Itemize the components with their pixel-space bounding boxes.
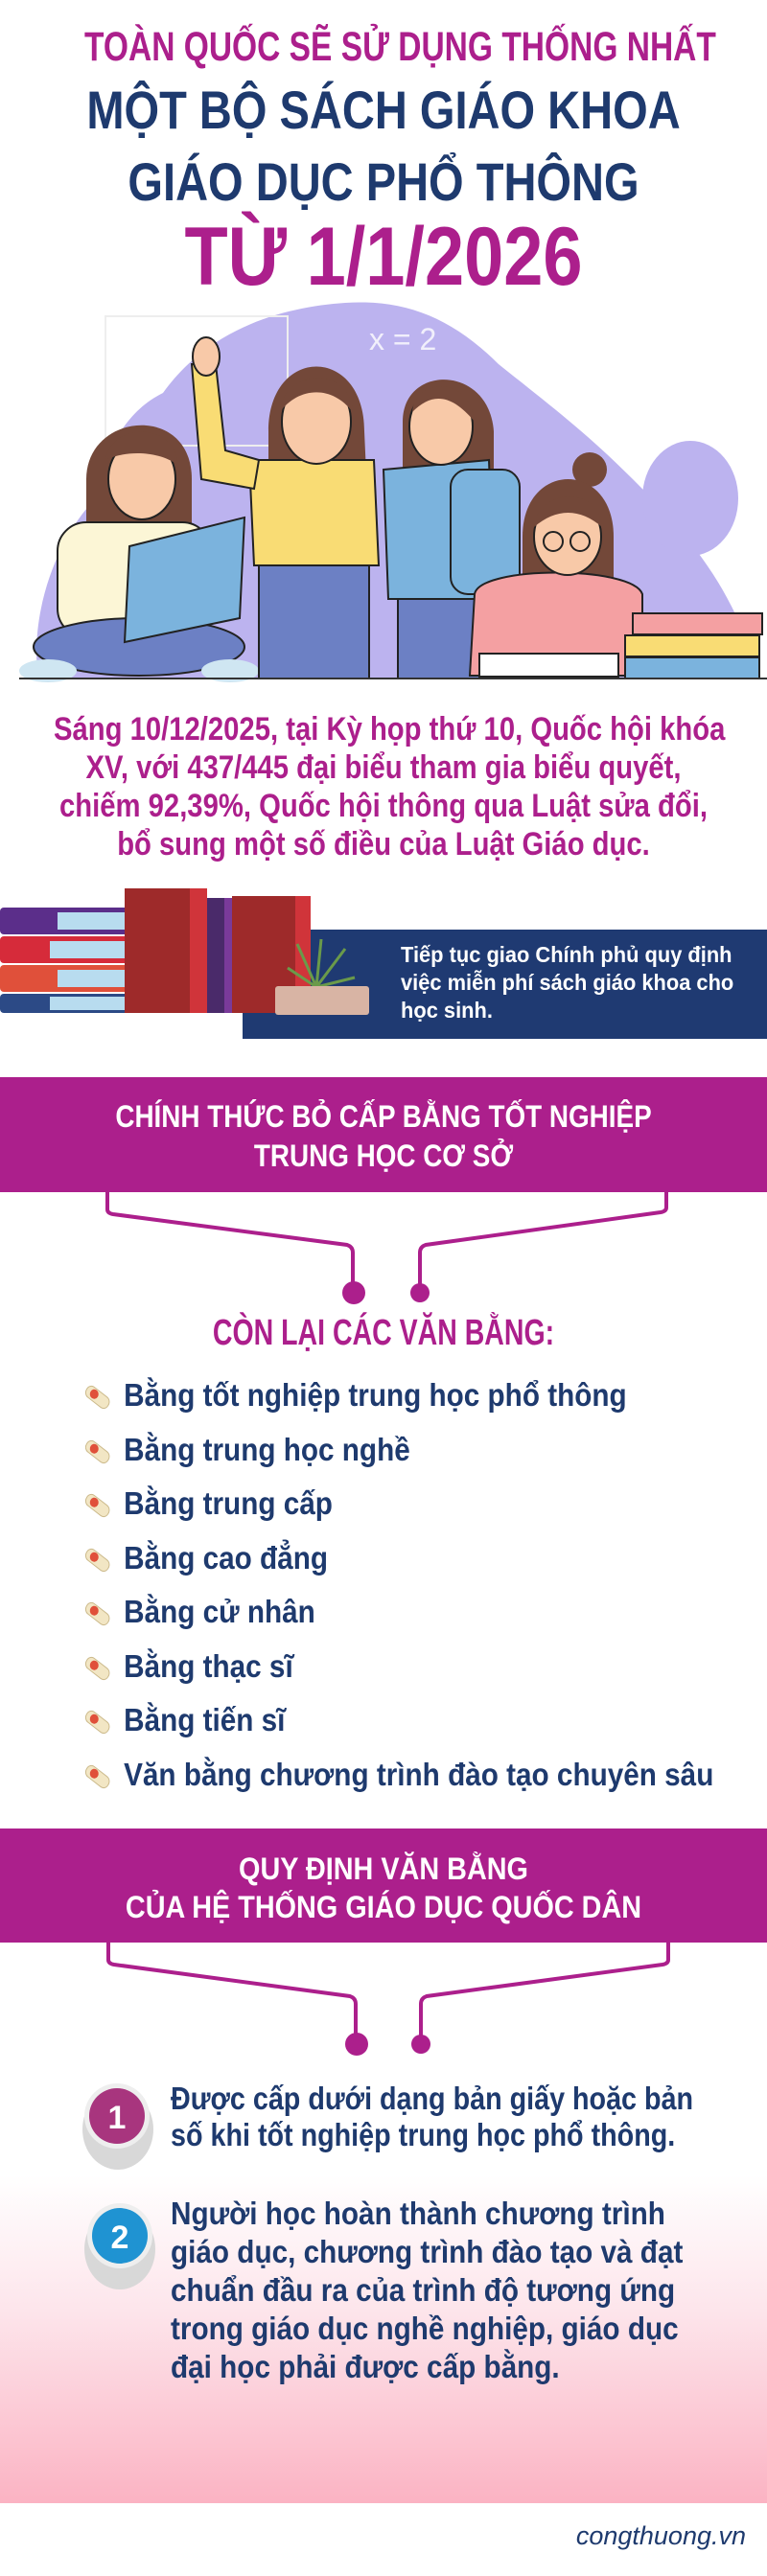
icon: books and plant xyxy=(0,888,369,1015)
intro paragraph: Sáng 10/12/2025, tại Kỳ họp thứ 10, Quốc hội khóa xyxy=(54,711,725,748)
list: diplomas: Bằng cử nhân xyxy=(124,1594,315,1629)
free textbook text: việc miễn phí sách giáo khoa cho xyxy=(401,970,733,995)
book stack xyxy=(625,613,762,678)
icon: number 2 xyxy=(84,2203,155,2289)
list: diplomas: Bằng tốt nghiệp trung học phổ thông xyxy=(124,1377,627,1413)
list: diplomas: Bằng cao đẳng xyxy=(124,1539,328,1576)
remaining diplomas heading: CÒN LẠI CÁC VĂN BẰNG: xyxy=(213,1313,554,1353)
list: diplomas: Bằng thạc sĩ xyxy=(124,1648,293,1683)
item 1 text xyxy=(171,2081,693,2152)
panel: abolish lower secondary diploma xyxy=(0,1077,767,1192)
free textbook text xyxy=(401,942,733,1023)
connector arrow 1 xyxy=(105,1192,668,1304)
list: diplomas xyxy=(84,1377,713,1792)
title line 1: TOÀN QUỐC SẼ SỬ DỤNG THỐNG NHẤT xyxy=(84,24,716,70)
item 1 text: Được cấp dưới dạng bản giấy hoặc bản xyxy=(171,2081,693,2116)
item 2 text: giáo dục, chương trình đào tạo và đạt xyxy=(171,2234,683,2269)
item 2 text xyxy=(171,2196,683,2384)
title line 2: MỘT BỘ SÁCH GIÁO KHOA xyxy=(86,80,681,140)
girl 4 pink with glasses xyxy=(470,452,642,677)
band heading 2: QUY ĐỊNH VĂN BẰNG xyxy=(239,1852,528,1886)
band heading: TRUNG HỌC CƠ SỞ xyxy=(254,1138,513,1173)
intro paragraph: bổ sung một số điều của Luật Giáo dục. xyxy=(117,826,650,862)
title xyxy=(84,23,716,303)
intro paragraph: XV, với 437/445 đại biểu tham gia biểu quyết, xyxy=(85,749,681,786)
band heading 2 xyxy=(126,1852,641,1924)
connector arrow 2 xyxy=(106,1943,670,2056)
panel: national education diploma rules xyxy=(0,1828,767,1943)
item 1 text: số khi tốt nghiệp trung học phổ thông. xyxy=(171,2117,675,2152)
list: diplomas: Bằng tiến sĩ xyxy=(124,1702,285,1737)
icon: number 1 xyxy=(82,2083,153,2170)
title date: TỪ 1/1/2026 xyxy=(184,211,582,303)
illustration: students: x = 2 xyxy=(369,322,436,356)
girl 3 blue with backpack xyxy=(384,380,520,678)
intro paragraph: chiếm 92,39%, Quốc hội thông qua Luật sửa đổi, xyxy=(59,788,708,824)
band heading 2: CỦA HỆ THỐNG GIÁO DỤC QUỐC DÂN xyxy=(126,1890,641,1924)
list: diplomas: Văn bằng chương trình đào tạo chuyên sâu xyxy=(124,1756,713,1792)
girl 2 yellow xyxy=(192,337,379,678)
footer source: congthuong.vn xyxy=(576,2521,746,2550)
icon: number 1: 1 xyxy=(108,2100,126,2136)
list: diplomas: Bằng trung học nghề xyxy=(124,1432,410,1466)
purple blob xyxy=(36,302,757,678)
icon: number 2: 2 xyxy=(111,2220,128,2256)
item 2 text: trong giáo dục nghề nghiệp, giáo dục xyxy=(171,2311,679,2346)
item 2 text: Người học hoàn thành chương trình xyxy=(171,2196,665,2231)
panel: free textbooks xyxy=(243,930,767,1039)
list: diplomas: Bằng trung cấp xyxy=(124,1485,333,1521)
band heading xyxy=(115,1099,652,1173)
pink background xyxy=(0,2175,767,2503)
free textbook text: học sinh. xyxy=(401,998,493,1023)
girl 1 sitting xyxy=(19,426,259,682)
illustration: students xyxy=(19,303,767,682)
band heading: CHÍNH THỨC BỎ CẤP BẰNG TỐT NGHIỆP xyxy=(115,1099,652,1134)
item 2 text: đại học phải được cấp bằng. xyxy=(171,2349,560,2384)
title line 3: GIÁO DỤC PHỔ THÔNG xyxy=(128,151,639,212)
free textbook text: Tiếp tục giao Chính phủ quy định xyxy=(401,942,732,967)
item 2 text: chuẩn đầu ra của trình độ tương ứng xyxy=(171,2272,675,2308)
intro paragraph xyxy=(54,711,726,862)
